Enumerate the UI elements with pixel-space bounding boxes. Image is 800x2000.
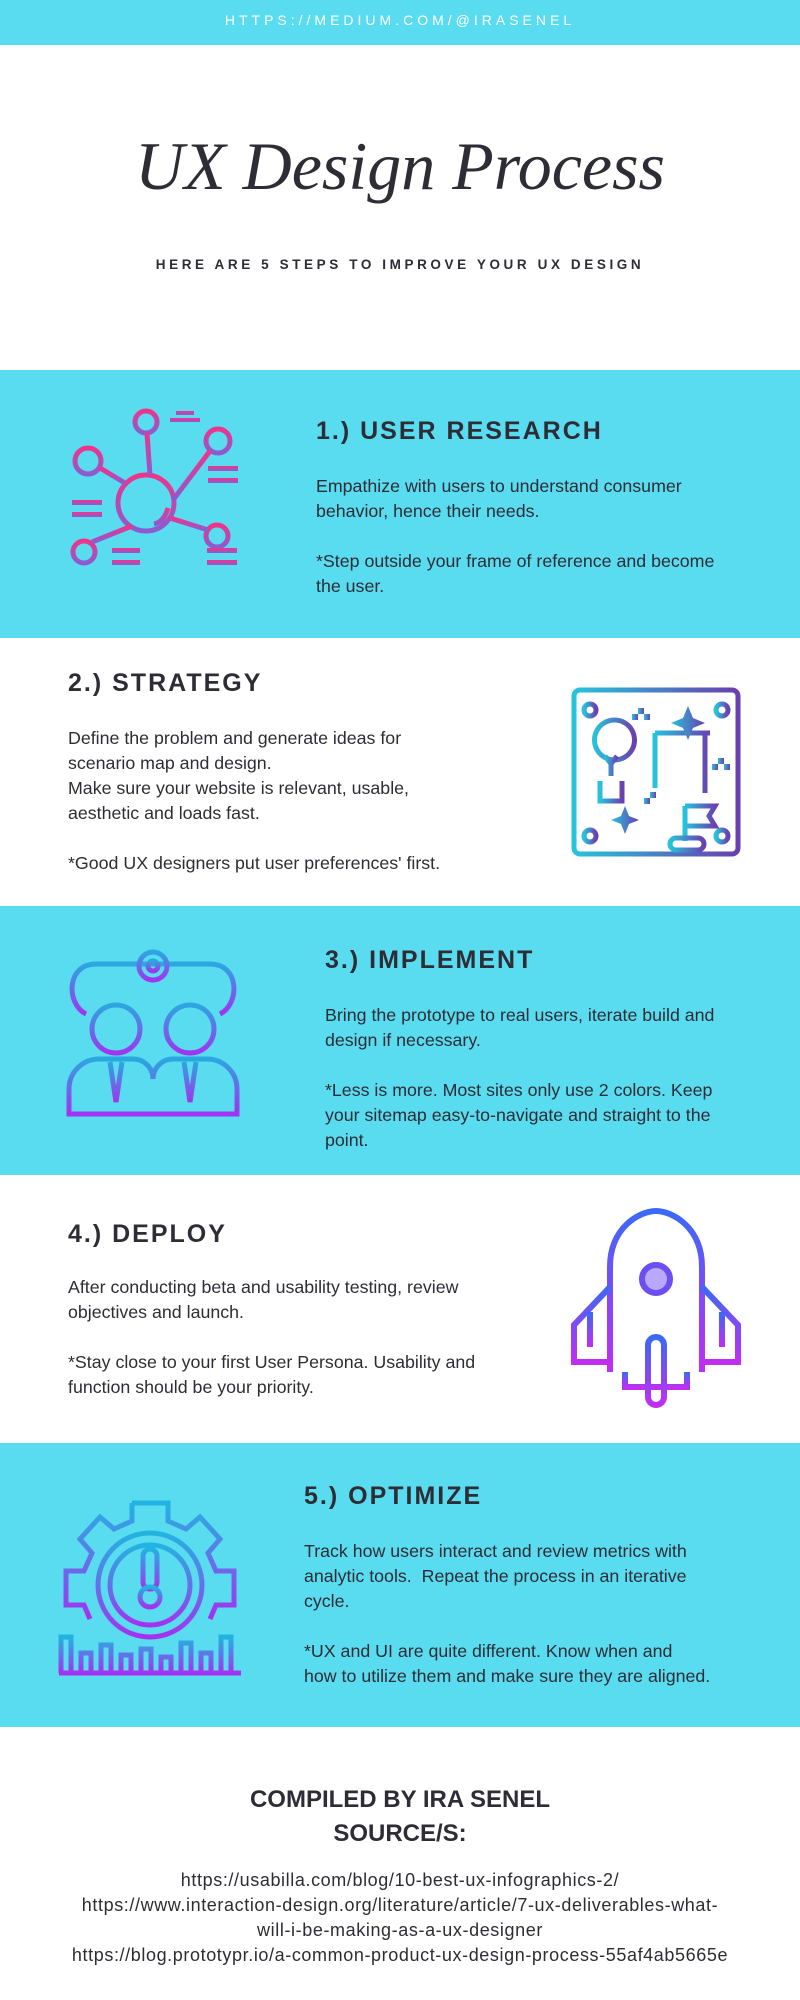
body text: scenario map and design. <box>68 753 272 773</box>
body text: analytic tools. Repeat the process in an iterative <box>304 1566 687 1586</box>
body text: your sitemap easy-to-navigate and straight to the <box>325 1105 710 1125</box>
body text <box>68 728 440 873</box>
body text: *UX and UI are quite different. Know when and <box>304 1641 672 1661</box>
icon: two people <box>66 950 240 1116</box>
footer: credits: SOURCE/S: <box>333 1820 467 1847</box>
body text: behavior, hence their needs. <box>316 501 539 521</box>
body text: *Less is more. Most sites only use 2 colors. Keep <box>325 1080 712 1100</box>
footer: sources: https://www.interaction-design.org/literature/article/7-ux-deliverables-what- <box>82 1895 718 1915</box>
body text: Define the problem and generate ideas for <box>68 728 401 748</box>
title: UX Design Process <box>135 128 665 204</box>
body text <box>68 1277 475 1397</box>
panel: deploy <box>68 1208 741 1408</box>
heading: 5.) OPTIMIZE <box>304 1482 482 1510</box>
footer: credits <box>250 1786 550 1847</box>
body text: objectives and launch. <box>68 1302 244 1322</box>
body text: Track how users interact and review metrics with <box>304 1541 687 1561</box>
body text: Bring the prototype to real users, iterate build and <box>325 1005 714 1025</box>
panel: strategy <box>68 669 740 873</box>
heading: 3.) IMPLEMENT <box>325 946 534 974</box>
footer: credits: COMPILED BY IRA SENEL <box>250 1786 550 1813</box>
heading: 1.) USER RESEARCH <box>316 417 603 445</box>
panel: implement <box>0 906 800 1175</box>
icon: map <box>572 688 740 856</box>
body text: *Stay close to your first User Persona. Usability and <box>68 1352 475 1372</box>
body text <box>304 1541 710 1686</box>
icon: gear gauge <box>58 1500 241 1676</box>
body text: aesthetic and loads fast. <box>68 803 260 823</box>
footer: sources: https://blog.prototypr.io/a-common-product-ux-design-process-55af4ab5665e <box>72 1945 728 1965</box>
top bar url: HTTPS://MEDIUM.COM/@IRASENEL <box>225 12 575 28</box>
heading: 4.) DEPLOY <box>68 1220 227 1248</box>
footer: sources: will-i-be-making-as-a-ux-designer <box>257 1920 543 1940</box>
body text: how to utilize them and make sure they are aligned. <box>304 1666 710 1686</box>
icon: network <box>70 408 238 566</box>
body text <box>325 1005 714 1150</box>
subtitle: HERE ARE 5 STEPS TO IMPROVE YOUR UX DESIGN <box>156 257 644 272</box>
top bar <box>0 0 800 45</box>
body text: After conducting beta and usability testing, review <box>68 1277 458 1297</box>
panel: user research <box>0 370 800 638</box>
body text: *Step outside your frame of reference and become <box>316 551 714 571</box>
panel: optimize <box>0 1443 800 1727</box>
footer: sources <box>72 1870 728 1965</box>
body text: the user. <box>316 576 384 596</box>
body text: Make sure your website is relevant, usable, <box>68 778 409 798</box>
body text: function should be your priority. <box>68 1377 314 1397</box>
heading: 2.) STRATEGY <box>68 669 262 697</box>
footer: sources: https://usabilla.com/blog/10-best-ux-infographics-2/ <box>181 1870 619 1890</box>
body text: cycle. <box>304 1591 349 1611</box>
icon: rocket <box>571 1208 741 1408</box>
body text: *Good UX designers put user preferences' first. <box>68 853 440 873</box>
body text: point. <box>325 1130 368 1150</box>
body text: design if necessary. <box>325 1030 481 1050</box>
body text <box>316 476 714 596</box>
body text: Empathize with users to understand consumer <box>316 476 682 496</box>
